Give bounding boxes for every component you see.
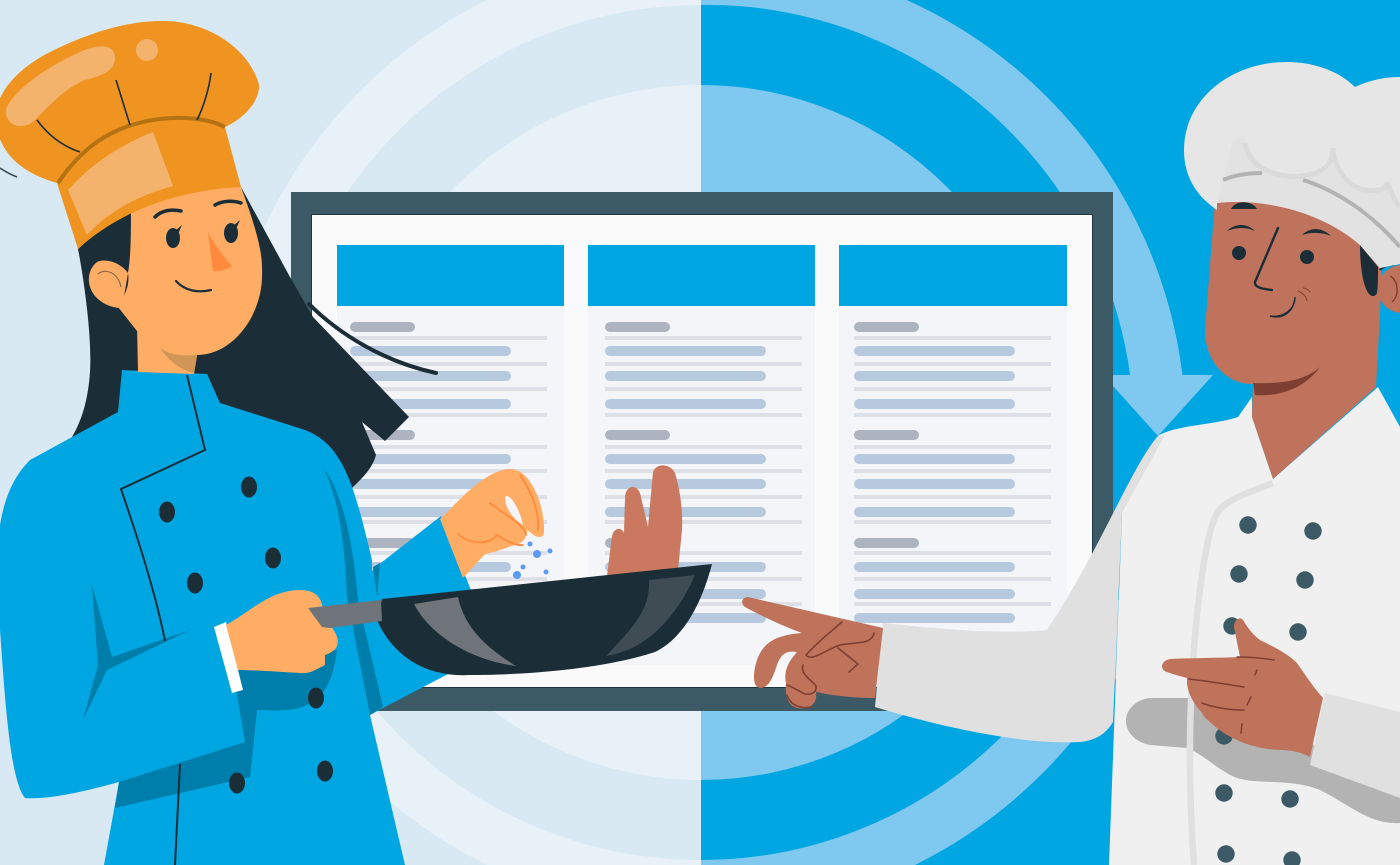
pan handle: [308, 600, 382, 628]
menu board: [291, 192, 1113, 711]
hair: [72, 187, 436, 490]
smile: [176, 281, 211, 291]
pointing hand on chest: [1162, 618, 1323, 757]
menu column one: [337, 245, 564, 665]
jacket buttons: [159, 476, 333, 794]
neck: [137, 325, 198, 374]
menu column two: [588, 245, 815, 665]
pointing sleeve: [875, 435, 1165, 742]
arm shadow: [1126, 698, 1400, 823]
arm shading and cuff: [214, 622, 243, 693]
arrow head on the ring: [1103, 375, 1213, 436]
jacket body: [0, 370, 405, 865]
menu column three: [839, 245, 1067, 665]
side hair: [1360, 245, 1378, 296]
male chef: [742, 62, 1400, 865]
forearm sleeve: [345, 516, 475, 715]
white coat body: [1109, 387, 1400, 865]
jacket seams: [121, 375, 205, 641]
jacket shadows: [115, 650, 337, 808]
coat placket: [1190, 483, 1273, 865]
raised hand behind pan: [607, 465, 682, 576]
left hand holding pan: [226, 590, 338, 673]
smile: [1270, 297, 1295, 317]
pointing hand toward menu: [742, 597, 883, 708]
face: [98, 180, 262, 355]
sprinkling hand with seasoning: [440, 469, 552, 579]
neck and face: [1205, 194, 1400, 479]
pan highlights: [414, 597, 516, 666]
woman chef: [0, 21, 475, 865]
ear: [89, 260, 128, 308]
eyes and brows: [155, 201, 241, 248]
eyes and brows: [1227, 202, 1331, 264]
right sleeve: [1310, 693, 1400, 798]
coat buttons: [1215, 516, 1322, 865]
nose: [208, 233, 232, 271]
frying pan: [308, 564, 712, 675]
white chef hat: [1184, 62, 1400, 268]
nose: [1255, 228, 1278, 290]
orange chef hat: [0, 21, 259, 249]
circular cycle rings: [236, 0, 1186, 865]
ear: [1378, 265, 1400, 313]
